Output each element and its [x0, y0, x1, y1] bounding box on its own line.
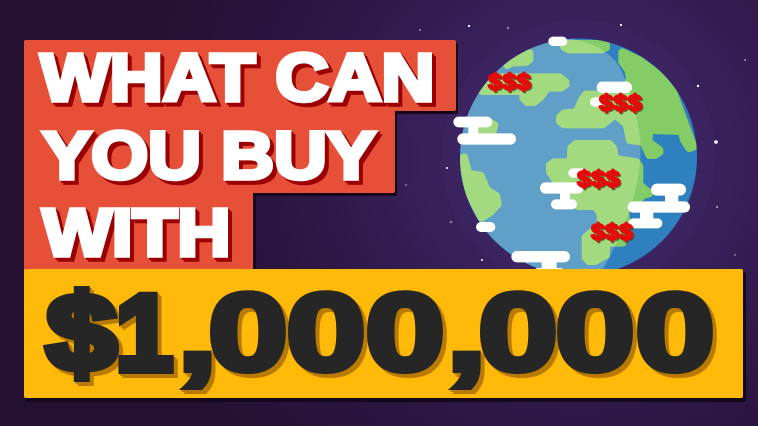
stars [405, 24, 746, 261]
money symbols on globe: $$$ [599, 90, 642, 116]
clouds [453, 37, 690, 273]
amount text: 1 [116, 274, 173, 394]
title text: YOU BUY [42, 118, 376, 194]
title text: WHAT CAN [40, 40, 435, 116]
money symbols on globe: $$$ [488, 69, 531, 95]
money symbols on globe: $$$ [577, 166, 620, 192]
globe [460, 38, 697, 269]
amount text: $ [47, 272, 116, 393]
amount text: ,000,000 [177, 272, 715, 394]
title panel: red stepped banner [24, 40, 458, 272]
title text: WITH [42, 196, 230, 270]
amount panel: yellow banner [24, 269, 746, 402]
globe halo [442, 20, 716, 294]
lit side of globe [460, 38, 640, 269]
money symbols on globe: $$$ [591, 219, 633, 245]
title text [40, 40, 435, 270]
money symbols on globe [488, 69, 642, 245]
land on shaded side [464, 44, 693, 261]
